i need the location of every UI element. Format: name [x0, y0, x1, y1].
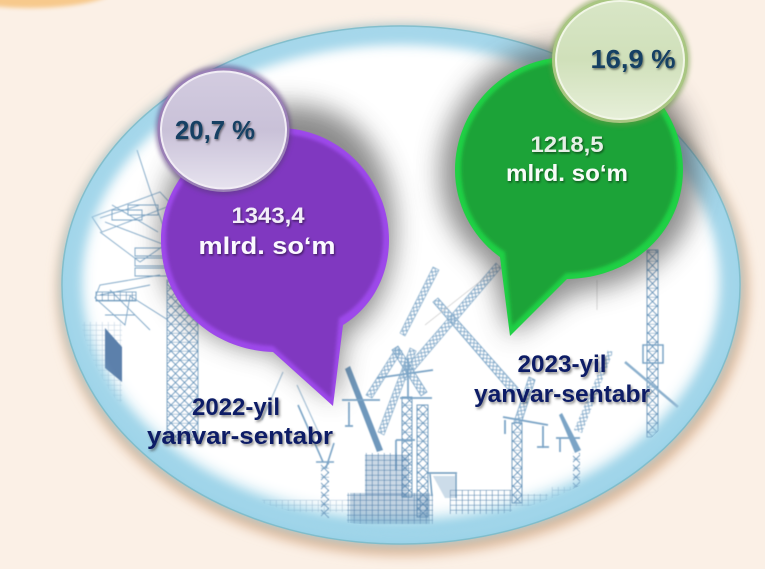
fade of illustration into blue rim — [70, 34, 732, 536]
green bubble shadow — [441, 45, 698, 335]
oval white interior — [79, 40, 723, 520]
purple bubble group — [156, 65, 394, 406]
percent circle 20,7 % — [156, 65, 292, 195]
crane at x 325 — [262, 372, 334, 518]
label 2023 — [474, 351, 650, 408]
purple bubble shadow — [160, 105, 394, 400]
percent circle 16,9 % — [550, 0, 690, 126]
central crane cluster — [342, 267, 439, 517]
label 2022: yanvar-sentabr — [147, 423, 333, 450]
left building — [82, 322, 122, 402]
percent value 20,7 %: 20,7 % — [175, 115, 255, 145]
central scaffolding base — [262, 453, 582, 524]
label 2023: 2023-yil — [518, 351, 606, 378]
construction illustration — [82, 150, 678, 524]
value 1343,4: 1343,4 — [232, 203, 305, 228]
label 2023: yanvar-sentabr — [474, 381, 650, 408]
left scaffold crane — [92, 150, 172, 330]
label 2022 — [147, 394, 333, 450]
green speech bubble — [455, 57, 683, 336]
central-right crane — [400, 263, 549, 503]
green bubble group — [441, 0, 698, 336]
value 1218,5: 1218,5 — [530, 132, 604, 157]
unit mlrd. so'm: mlrd. so‘m — [198, 233, 336, 260]
crane at x 576 — [556, 350, 613, 489]
right crane — [425, 250, 678, 437]
purple bubble inner face — [166, 134, 383, 398]
percent value 16,9 %: 16,9 % — [590, 44, 676, 74]
decorative orange arc at top — [0, 0, 115, 8]
purple speech bubble — [161, 128, 389, 406]
label 2022: 2022-yil — [192, 394, 280, 421]
left crane tower — [167, 280, 198, 440]
green bubble inner face — [461, 62, 677, 326]
unit mlrd. so'm: mlrd. so‘m — [506, 160, 628, 186]
